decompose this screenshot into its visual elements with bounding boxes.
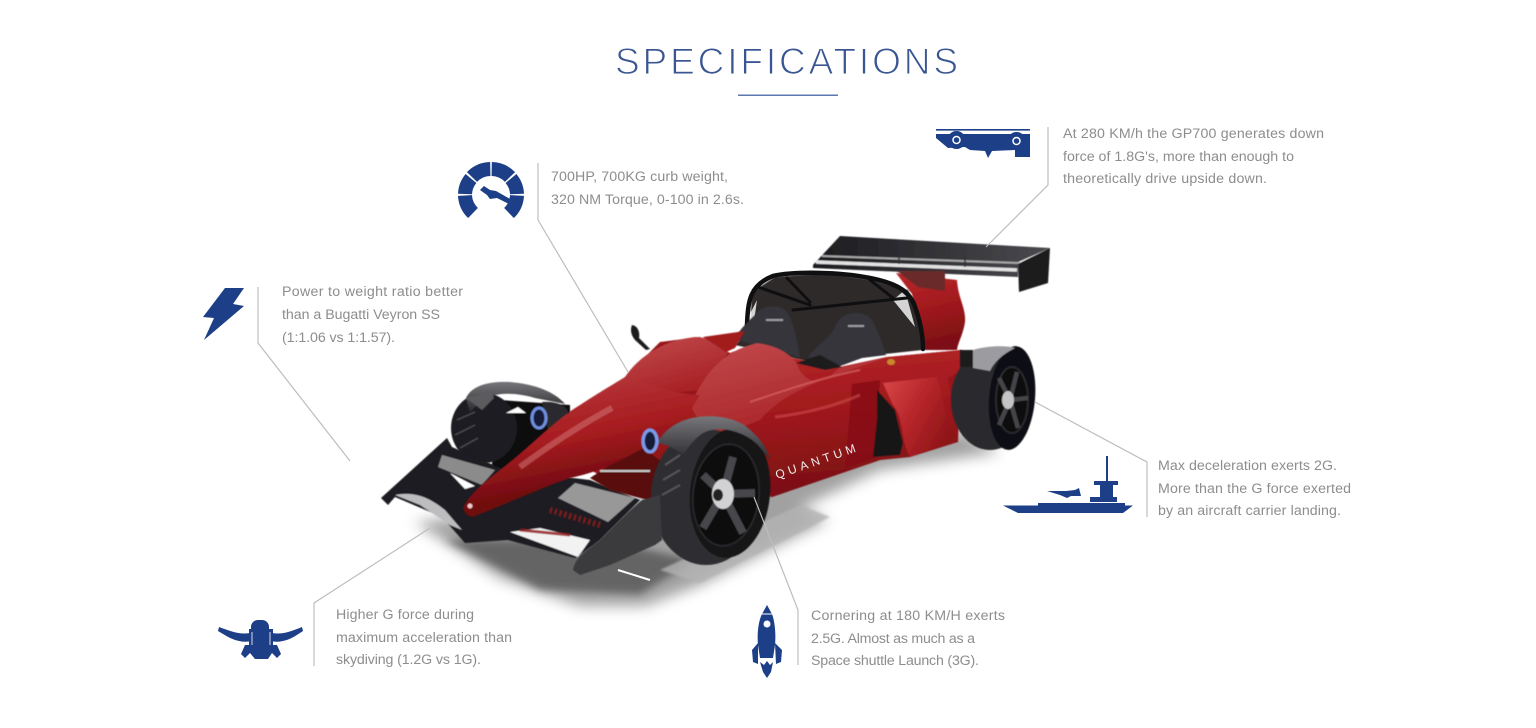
nose cone [463, 377, 700, 517]
spec text: Space shuttle Launch (3G). [811, 653, 979, 669]
spec text: by an aircraft carrier landing. [1158, 503, 1341, 519]
spec text: 2.5G. Almost as much as a [811, 631, 975, 647]
side indicator [887, 359, 895, 365]
callout line [754, 497, 798, 665]
ground shadow [415, 430, 1000, 606]
callout line [314, 528, 430, 666]
icon: wing section [936, 129, 1030, 158]
spec text: 320 NM Torque, 0-100 in 2.6s. [551, 192, 744, 208]
spec text [282, 284, 463, 346]
icon: skydiver [218, 620, 303, 659]
nose tip highlight [468, 504, 472, 508]
red cockpit rim [703, 331, 745, 352]
title underline [738, 94, 838, 96]
front suspension bay [590, 445, 672, 502]
roll cage [747, 273, 923, 349]
right front endplate [573, 495, 662, 575]
title: SPECIFICATIONS [615, 41, 958, 82]
spec text: At 280 KM/h the GP700 generates down [1063, 126, 1324, 142]
main body [463, 325, 962, 517]
spec text: Max deceleration exerts 2G. [1158, 458, 1337, 474]
seats [735, 306, 886, 368]
spec text: than a Bugatti Veyron SS [282, 307, 440, 323]
spec text [811, 608, 1005, 669]
wing mirror [631, 325, 650, 350]
spec text: 700HP, 700KG curb weight, [551, 169, 728, 185]
spec text [551, 169, 744, 208]
far front wheel [451, 382, 570, 480]
side body panel [625, 343, 962, 497]
front fender [657, 416, 770, 460]
suspension arm [600, 470, 650, 472]
nose highlight [520, 408, 612, 467]
headlight ring [643, 430, 657, 452]
rear wing [813, 236, 1050, 292]
left cowl [625, 337, 728, 395]
interior highlights [748, 290, 915, 327]
windscreen [796, 355, 842, 370]
callout line [1035, 402, 1147, 517]
spec: power to weight [203, 284, 463, 461]
spec text: (1:1.06 vs 1:1.57). [282, 330, 395, 346]
side pod [883, 377, 957, 457]
body highlight [750, 370, 860, 402]
front wheel [643, 416, 777, 565]
callout line [258, 287, 350, 461]
spec text [1158, 458, 1351, 519]
spec text: maximum acceleration than [336, 630, 512, 646]
spec text: More than the G force exerted [1158, 481, 1351, 497]
spec: performance [465, 163, 744, 372]
spec text: Higher G force during [336, 607, 474, 623]
spec text: theoretically drive upside down. [1063, 171, 1267, 187]
car illustration [381, 236, 1050, 606]
spec text [336, 607, 512, 668]
rear wheel [951, 344, 1039, 452]
icon: rocket [752, 605, 782, 678]
dark body intake [873, 390, 903, 457]
spec: deceleration [1003, 402, 1351, 519]
spec text [1063, 126, 1324, 187]
QUANTUM logo: QUANTUM [773, 441, 857, 482]
spec: cornering [752, 497, 1005, 678]
spec: downforce [936, 126, 1324, 247]
callout line [538, 163, 628, 372]
spec text: force of 1.8G's, more than enough to [1063, 149, 1294, 165]
icon: aircraft carrier [1003, 456, 1133, 513]
wing mount [897, 271, 945, 291]
callout line [986, 127, 1048, 247]
body sheen [775, 395, 860, 417]
right cowl [690, 343, 887, 440]
body base [472, 337, 962, 517]
spec text: skydiving (1.2G vs 1G). [336, 652, 481, 668]
front wing [381, 438, 640, 558]
icon: lightning bolt [203, 288, 244, 340]
spec: acceleration [218, 528, 512, 668]
spec text: Power to weight ratio better [282, 284, 463, 300]
icon: speedometer [465, 169, 519, 213]
spec text: Cornering at 180 KM/H exerts [811, 608, 1005, 624]
dark side shading [845, 380, 880, 468]
rear bodywork tower [896, 273, 965, 350]
cockpit interior [735, 273, 922, 362]
